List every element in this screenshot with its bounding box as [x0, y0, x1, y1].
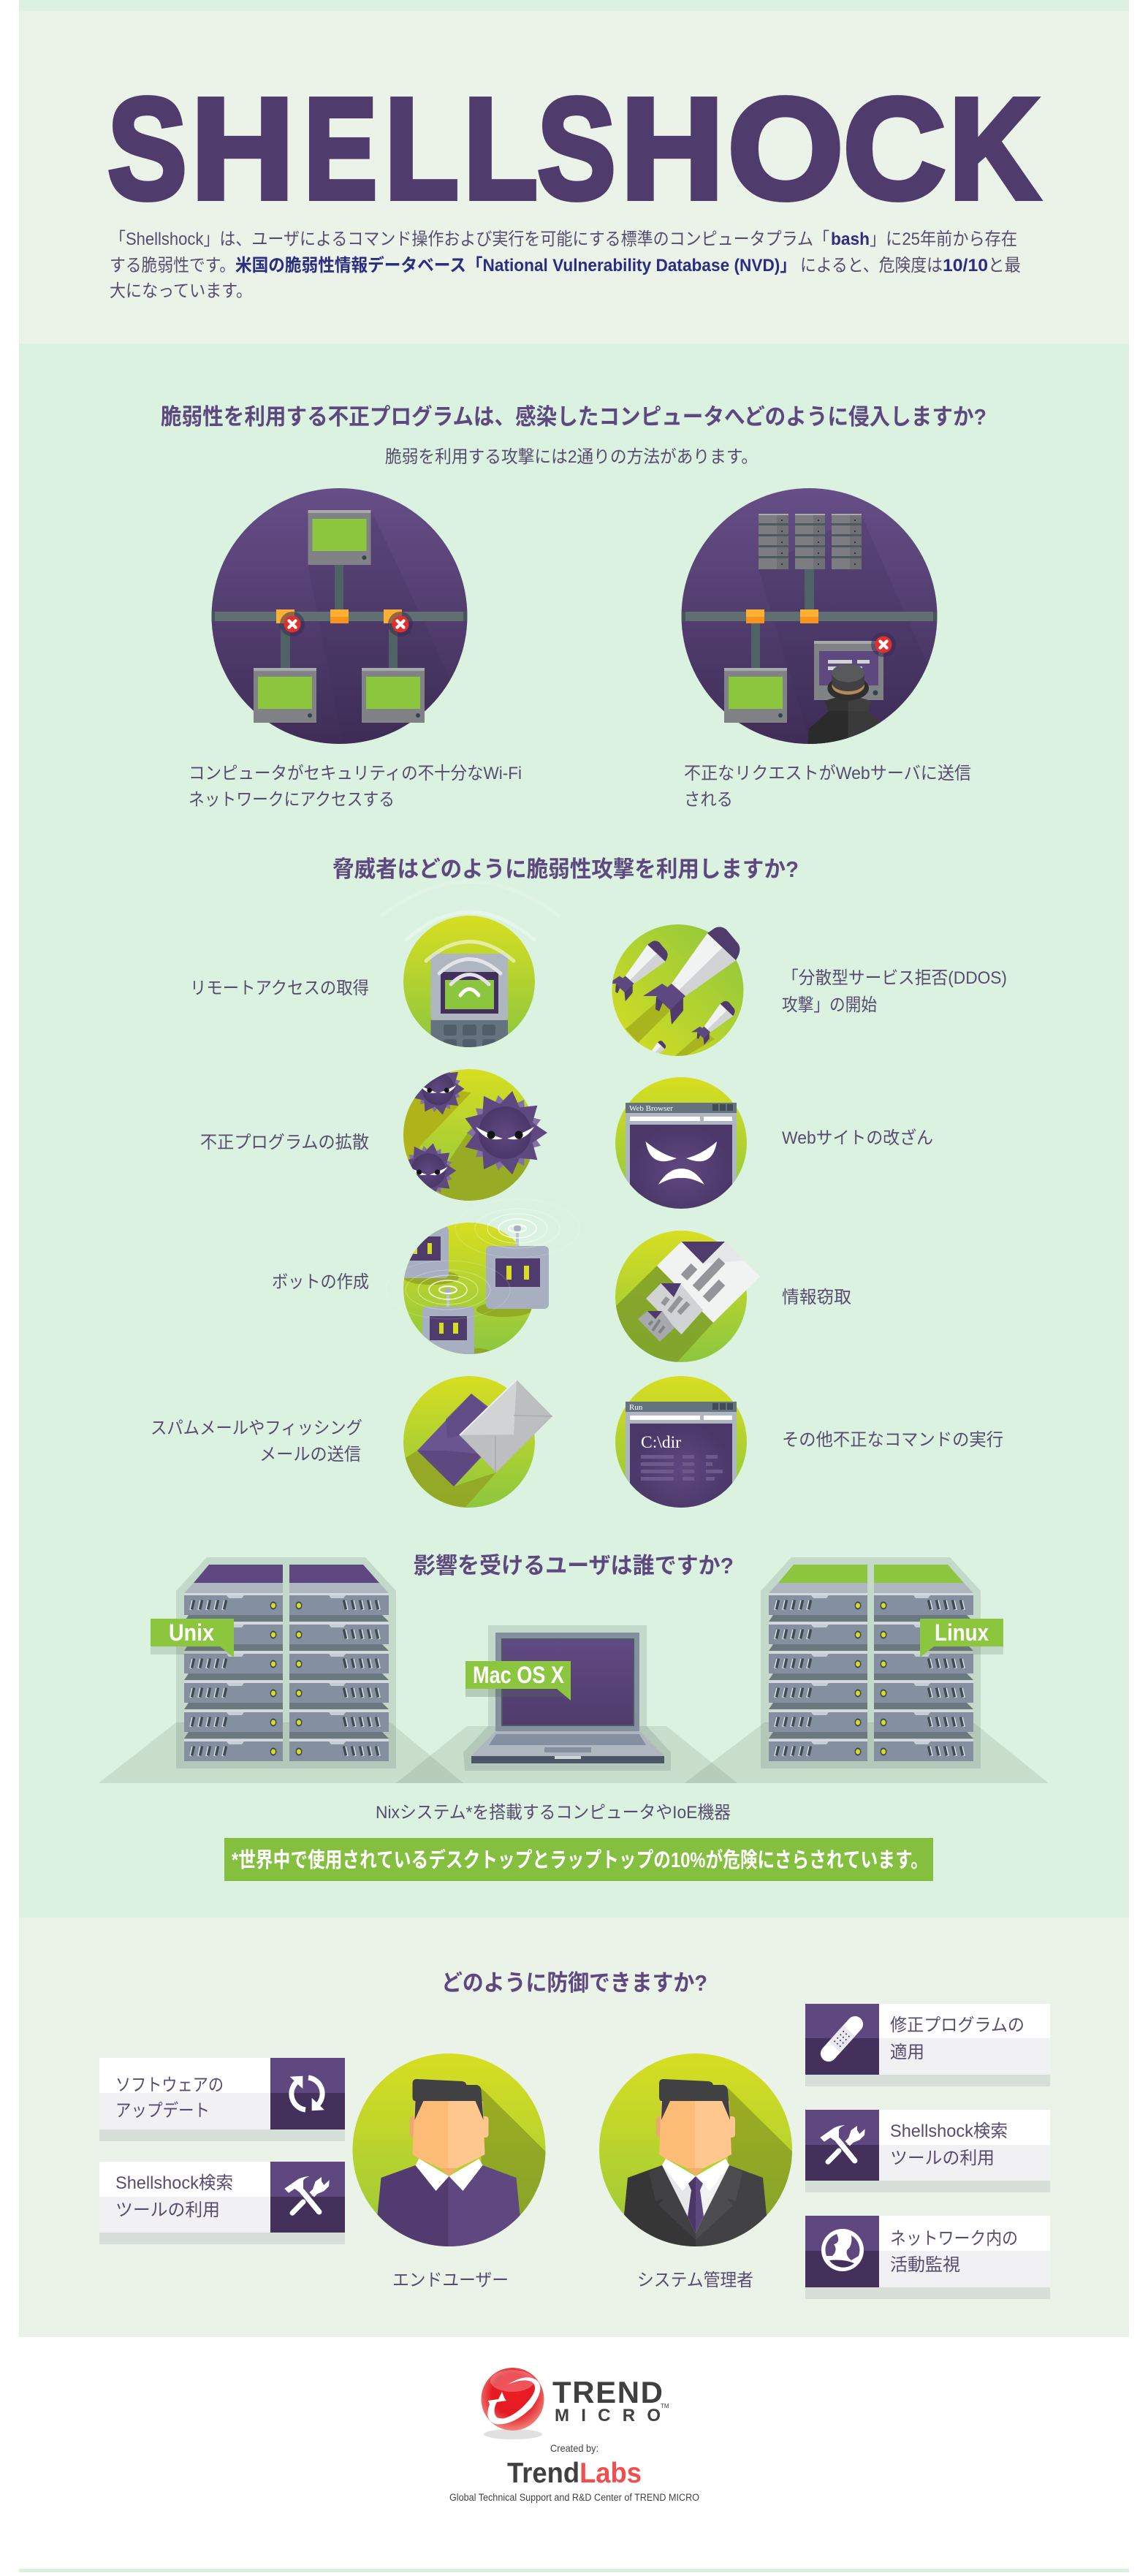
intro text	[110, 229, 1021, 301]
intro text: 」に25年前から存在	[870, 229, 1017, 249]
text: ツールの利用	[890, 2148, 995, 2168]
card: scan tool left	[99, 2162, 345, 2244]
icon: command window	[615, 1376, 747, 1519]
text	[115, 2173, 233, 2220]
intro text: 大になっています。	[110, 281, 252, 301]
caption: wifi	[189, 764, 522, 810]
title: H	[191, 69, 294, 229]
credit: tagline: Global Technical Support and R&D Center of TREND MICRO	[449, 2492, 699, 2503]
icon: bandage	[817, 2013, 867, 2065]
title: S	[108, 69, 187, 229]
text: nix systems: Nixシステム*を搭載するコンピュータやIoE機器	[376, 1803, 731, 1823]
monitor	[724, 668, 787, 723]
label: malware spreading: 不正プログラムの拡散	[200, 1133, 369, 1152]
blocked marks	[280, 612, 413, 637]
panel: intro	[19, 11, 1129, 343]
text: Shellshock検索	[115, 2173, 233, 2193]
laptop	[471, 1633, 664, 1763]
logo: Trend Micro: TREND	[552, 2375, 663, 2409]
diagram: wifi network	[211, 488, 475, 745]
text	[890, 2121, 1008, 2168]
icon: tools	[284, 2176, 330, 2213]
icon: spam mail	[398, 1376, 552, 1511]
logo: Trend Micro	[481, 2368, 669, 2439]
logo: TrendLabs: TrendLabs	[507, 2458, 642, 2489]
icon: defaced website	[615, 1077, 747, 1220]
label: spam: メールの送信	[259, 1445, 361, 1464]
server stacks	[759, 514, 862, 569]
text	[890, 2015, 1025, 2062]
server rack: unix	[184, 1565, 389, 1761]
hacked terminal	[814, 641, 883, 700]
title: C	[843, 69, 946, 229]
blocked mark	[871, 632, 896, 657]
title: E	[304, 69, 377, 229]
label: ddos: 「分散型サービス拒否(DDOS)	[782, 968, 1007, 988]
tag: Unix	[151, 1619, 234, 1657]
intro text: 10/10	[943, 256, 988, 276]
text: 修正プログラムの	[890, 2015, 1025, 2035]
caption: web request: 不正なリクエストがWebサーバに送信	[684, 764, 971, 783]
credit: created by: Created by:	[550, 2442, 598, 2454]
icon: tools	[820, 2125, 865, 2162]
text: Shellshock検索	[890, 2121, 1008, 2141]
tag: Unix: Unix	[169, 1619, 214, 1646]
icon: refresh	[290, 2076, 324, 2110]
card: monitoring	[805, 2216, 1050, 2299]
callout: 10 percent	[224, 1838, 933, 1881]
person: administrator	[599, 2053, 795, 2251]
label: bots: ボットの作成	[272, 1272, 369, 1292]
top band	[19, 0, 1129, 11]
icon: remote access	[403, 911, 536, 1047]
tag: Mac OS X	[465, 1661, 571, 1701]
tag: Mac OS X: Mac OS X	[473, 1662, 565, 1688]
card: scan tool right	[805, 2110, 1050, 2192]
text: ツールの利用	[115, 2200, 220, 2220]
label: ddos: 攻撃」の開始	[782, 995, 877, 1015]
text: 適用	[890, 2043, 924, 2062]
label: ddos	[782, 968, 1007, 1015]
device halos	[176, 1557, 981, 1771]
caption: web request: される	[684, 790, 733, 810]
title: L	[464, 69, 538, 229]
icon: bots	[403, 1209, 560, 1354]
intro text: によると、危険度は	[800, 256, 943, 276]
intro text: する脆弱性です。	[110, 256, 235, 276]
intro text: 「Shellshock」は、ユーザによるコマンド操作および実行を可能にする標準のコンピュータプラム「	[110, 229, 829, 249]
diagram: web server attack	[681, 488, 944, 745]
icon: globe	[821, 2229, 864, 2271]
monitor icons	[254, 510, 425, 723]
hacker	[807, 664, 881, 744]
caption: web request	[684, 764, 971, 810]
tag: Linux	[920, 1619, 1003, 1657]
window title: Run	[629, 1403, 643, 1412]
icon: malware	[403, 1069, 547, 1201]
text	[115, 2075, 224, 2121]
label: remote access: リモートアクセスの取得	[190, 979, 369, 998]
label: defacement: Webサイトの改ざん	[782, 1128, 933, 1148]
intro text: と最	[988, 256, 1021, 276]
card: patch	[805, 2004, 1050, 2086]
title: H	[621, 69, 723, 229]
person: end user	[352, 2053, 548, 2251]
intro text: 米国の脆弱性情報データベース「National Vulnerability Database (NVD)」	[235, 255, 797, 276]
callout: 10 percent: *世界中で使用されているデスクトップとラップトップの10%が危険にさらされています。	[232, 1847, 928, 1872]
label: other commands: その他不正なコマンドの実行	[782, 1430, 1003, 1450]
logo: Trend Micro: TM	[661, 2403, 669, 2409]
subheading: 脆弱を利用する攻撃には2通りの方法があります。	[385, 447, 758, 467]
connectors	[746, 609, 818, 623]
caption: wifi: ネットワークにアクセスする	[189, 790, 395, 810]
text: ソフトウェアの	[115, 2075, 224, 2095]
title: L	[385, 69, 459, 229]
label: data theft: 情報窃取	[782, 1288, 851, 1307]
bottom band	[19, 2569, 1129, 2572]
intro text: bash	[831, 229, 870, 249]
panel: defense	[19, 1918, 1129, 2337]
text: ネットワーク内の	[890, 2229, 1018, 2249]
text: アップデート	[115, 2101, 210, 2121]
caption: wifi: コンピュータがセキュリティの不十分なWi-Fi	[189, 764, 522, 783]
icon: stolen documents	[607, 1231, 760, 1365]
label: spam: スパムメールやフィッシング	[151, 1418, 362, 1438]
logo: Trend Micro: MICRO	[555, 2406, 661, 2425]
text	[890, 2229, 1018, 2275]
heading: infection: 脆弱性を利用する不正プログラムは、感染したコンピュータへどのように侵入しますか?	[161, 404, 987, 430]
label: administrator: システム管理者	[637, 2271, 753, 2290]
heading: defense: どのように防御できますか?	[441, 1970, 707, 1996]
title: K	[949, 69, 1039, 229]
label: end user: エンドユーザー	[392, 2271, 509, 2290]
connectors	[276, 609, 402, 623]
title: O	[728, 69, 843, 229]
icon: rockets	[608, 924, 744, 1065]
title: S	[538, 69, 615, 229]
window title: Web Browser	[629, 1104, 673, 1113]
floor shadows	[99, 1722, 1049, 1783]
command text: C:\dir	[641, 1433, 681, 1451]
text: 活動監視	[890, 2255, 960, 2275]
card: software update	[99, 2058, 345, 2141]
heading: affected users: 影響を受けるユーザは誰ですか?	[414, 1553, 734, 1578]
panel: attack section background	[19, 343, 1129, 1918]
server rack: linux	[769, 1565, 973, 1761]
label: spam	[151, 1418, 362, 1464]
tag: Linux: Linux	[935, 1619, 989, 1646]
heading: threat actors: 脅威者はどのように脆弱性攻撃を利用しますか?	[332, 856, 799, 882]
